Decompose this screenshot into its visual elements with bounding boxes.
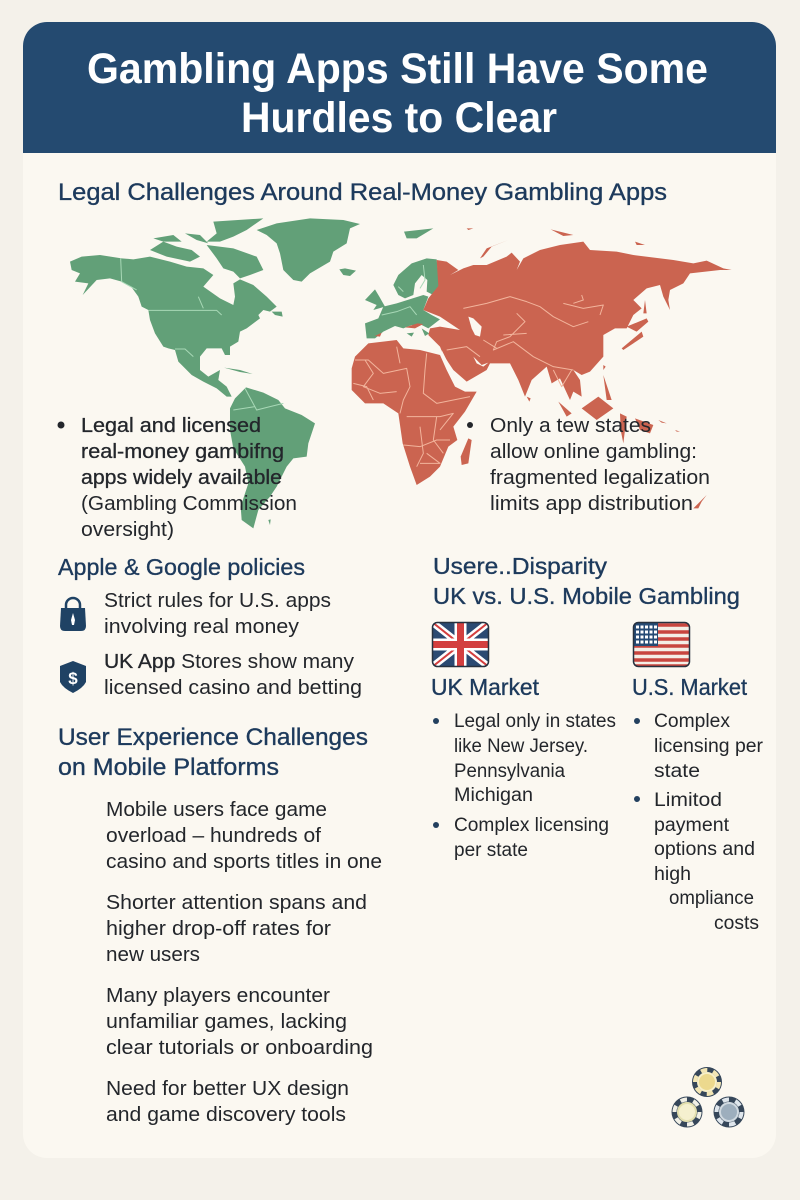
heading: user experience challenges: User Experience Challenges	[58, 724, 368, 751]
text: game overload: overload – hundreds of	[106, 825, 321, 847]
list: U.S. market points: Complex	[654, 711, 730, 732]
list: U.S. market points: licensing per	[654, 736, 764, 757]
text: US legal bullet: allow online gambling:	[490, 441, 697, 463]
list: U.S. market points: Limitod	[654, 790, 722, 811]
text: unfamiliar games: clear tutorials or onboarding	[106, 1037, 373, 1059]
text: game overload: casino and sports titles in one	[106, 851, 382, 873]
text: game overload: Mobile users face game	[106, 799, 327, 821]
chip: cream	[672, 1096, 702, 1128]
text: UK app stores: licensed casino and betting	[104, 677, 362, 699]
list: U.S. market points: high	[654, 864, 691, 885]
text: attention spans: Shorter attention spans and	[106, 892, 367, 914]
icon: casino chips	[672, 1067, 744, 1128]
text: better UX: Need for better UX design	[106, 1078, 349, 1100]
chip: slate	[714, 1096, 744, 1128]
text: attention spans: new users	[106, 944, 200, 966]
list: UK market points: per state	[454, 840, 528, 861]
icon: UK flag	[432, 622, 489, 667]
map: Eurasia and Africa in red	[352, 228, 732, 508]
map: borders	[121, 258, 603, 467]
text: US legal bullet: Only a tew states	[490, 415, 651, 437]
icon: dollar shield: $	[68, 669, 78, 688]
text: U.S. app rules	[104, 590, 331, 638]
list: U.S. market points: ompliance	[669, 888, 754, 909]
list: UK market points: Complex licensing	[454, 815, 609, 836]
text: unfamiliar games: Many players encounter	[106, 985, 330, 1007]
text: UK legal bullet: oversight)	[81, 519, 174, 541]
title banner: Hurdles to Clear	[241, 94, 557, 142]
heading: apple and google policies: Apple & Google policies	[58, 554, 305, 580]
text: game overload	[106, 799, 382, 873]
title banner: Gambling Apps Still Have Some	[87, 45, 708, 93]
text: UK legal bullet: apps widely available	[81, 467, 282, 489]
list: U.S. market points: costs	[714, 913, 759, 934]
heading: UK market: UK Market	[431, 674, 540, 700]
heading: user experience challenges: on Mobile Platforms	[58, 754, 279, 781]
heading: U.S. market: U.S. Market	[632, 674, 748, 700]
list: UK market points: Michigan	[454, 785, 533, 806]
heading: user experience challenges	[58, 724, 368, 781]
map: Americas and Greenland in green	[70, 218, 360, 528]
list: U.S. market points	[634, 711, 764, 934]
text: U.S. app rules: involving real money	[104, 616, 299, 638]
text: attention spans	[106, 892, 367, 966]
list: UK market points	[433, 711, 616, 861]
heading: user disparity: Usere..Disparity	[433, 553, 608, 579]
chip: gold	[692, 1067, 722, 1097]
map: inland seas	[442, 317, 488, 387]
heading: legal challenges: Legal Challenges Around Real-Money Gambling Apps	[58, 179, 667, 206]
text: U.S. app rules: Strict rules for U.S. apps	[104, 590, 331, 612]
text: attention spans: higher drop-off rates for	[106, 918, 331, 940]
text: better UX: and game discovery tools	[106, 1104, 346, 1126]
text: US legal bullet	[467, 415, 710, 515]
list: U.S. market points: state	[654, 761, 700, 782]
list: UK market points: Pennsylvania	[454, 761, 565, 782]
icon: dollar shield	[60, 661, 86, 693]
text: better UX	[106, 1078, 349, 1126]
heading: user disparity	[433, 553, 740, 609]
text: US legal bullet: limits app distribution	[490, 493, 693, 515]
map: Europe in green	[365, 228, 440, 338]
world map	[70, 218, 732, 528]
list: UK market points: Legal only in states	[454, 711, 616, 732]
list: U.S. market points: options and	[654, 839, 755, 860]
text: UK legal bullet: (Gambling Commission	[81, 493, 297, 515]
icon: padlock	[60, 598, 86, 631]
text: US legal bullet: fragmented legalization	[490, 467, 710, 489]
list: U.S. market points: payment	[654, 815, 730, 836]
text: UK legal bullet: Legal and licensed	[81, 415, 261, 437]
text: UK app stores: UK App Stores show many	[104, 651, 354, 673]
heading: user disparity: UK vs. U.S. Mobile Gambling	[433, 583, 740, 609]
text: UK app stores	[104, 651, 362, 699]
text: unfamiliar games	[106, 985, 373, 1059]
list: UK market points: like New Jersey.	[454, 736, 588, 757]
text: UK legal bullet	[58, 415, 297, 541]
title banner	[23, 22, 776, 153]
icon: US flag	[633, 622, 690, 667]
text: unfamiliar games: unfamiliar games, lacking	[106, 1011, 347, 1033]
text: UK legal bullet: real-money gambifng	[81, 441, 284, 463]
